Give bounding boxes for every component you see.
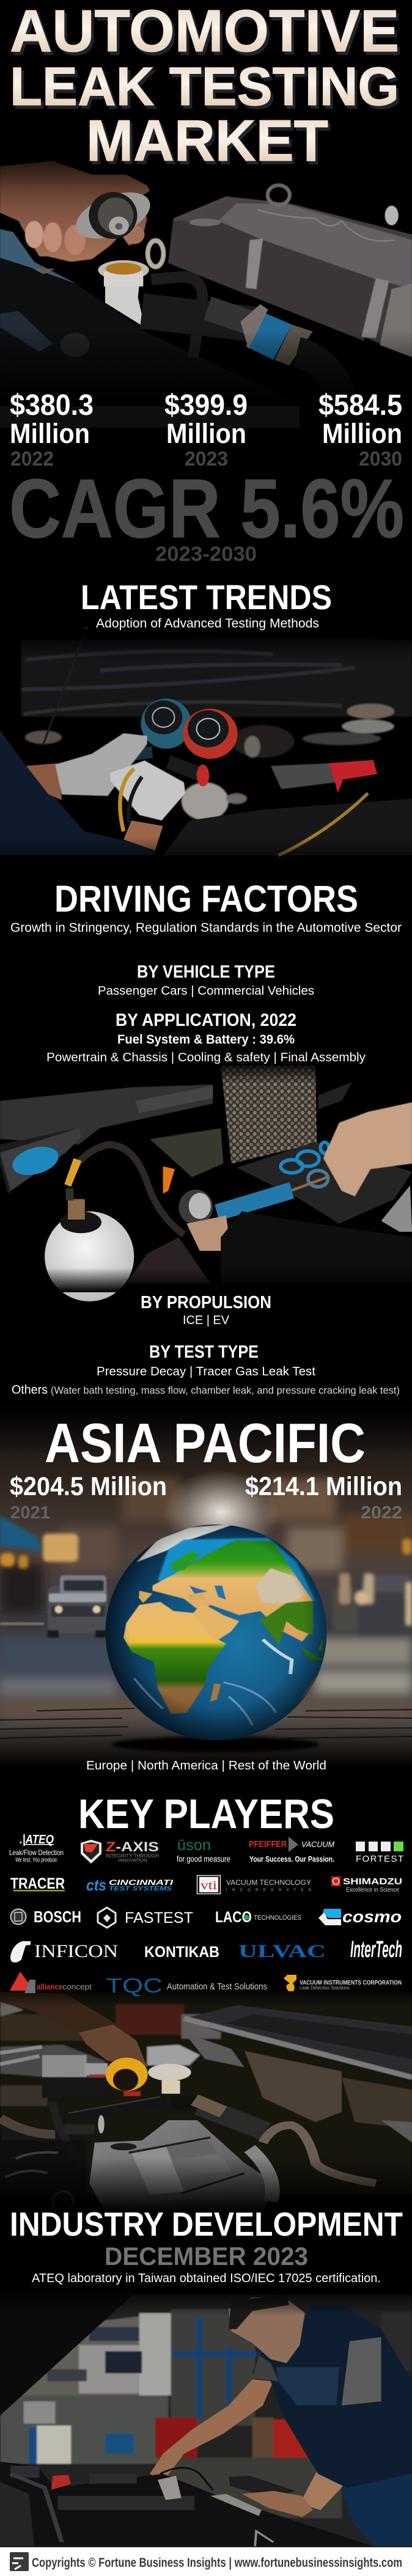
market size 2030: Million	[322, 418, 402, 449]
by propulsion: ICE | EV	[183, 1314, 230, 1327]
radiator cap	[70, 183, 156, 247]
by application: Fuel System & Battery : 39.6%	[117, 1033, 295, 1047]
by test type: (Water bath testing, mass flow, chamber leak, and pressure cracking leak test)	[51, 1385, 400, 1396]
driving factors heading	[10, 878, 402, 935]
bottle	[45, 1188, 134, 1301]
logo: Cosmo	[318, 1908, 402, 1926]
logo: Kontikab: KONTIKAB	[144, 1944, 219, 1961]
bright battery	[0, 2047, 42, 2064]
logos: key players	[9, 1833, 403, 1997]
raised hood	[0, 2287, 142, 2415]
logo: Cincinnati Test Systems: TEST SYSTEMS	[109, 1886, 172, 1892]
logo: Pfeiffer Vacuum	[249, 1837, 334, 1864]
silver pipe	[263, 2125, 376, 2183]
asia pacific 2021 value: $204.5 Million	[10, 1472, 167, 1501]
market size 2023: $399.9	[164, 389, 248, 422]
icon: globe	[105, 1523, 326, 1740]
photo: manifold gauges	[0, 627, 412, 855]
logo: VTI: vti	[200, 1879, 218, 1892]
logo: Vacuum Instruments Corporation	[284, 1975, 402, 1991]
photo: engine with yellow oil cap	[0, 1992, 412, 2212]
pressure gauge	[178, 1190, 213, 1225]
logo: VTI: INCORPORATED	[226, 1889, 312, 1892]
garage background	[0, 2295, 412, 2548]
fade under title	[0, 110, 412, 189]
logo: LACO Technologies: LACO	[215, 1909, 252, 1926]
logo: Z-Axis: INTEGRITY THROUGH	[106, 1853, 159, 1859]
logo: Shimadzu: Excellence in Science	[346, 1887, 399, 1894]
title: AUTOMOTIVE	[12, 1, 402, 67]
latest trends heading: Adoption of Advanced Testing Methods	[96, 617, 319, 631]
market size 2030	[318, 389, 402, 470]
by test type: BY TEST TYPE	[149, 1342, 259, 1362]
title: LEAK TESTING	[10, 56, 399, 117]
market size 2022: $380.3	[10, 389, 94, 422]
logo: VTI: VACUUM TECHNOLOGY	[226, 1878, 311, 1887]
logo: ATEQ	[9, 1833, 64, 1864]
hands	[186, 1102, 412, 1283]
title: MARKET	[86, 108, 328, 174]
latest trends heading: LATEST TRENDS	[81, 578, 332, 617]
market size 2023: Million	[166, 418, 246, 449]
footer logo	[10, 2552, 29, 2571]
latest trends heading	[81, 578, 332, 631]
tablet and hand	[229, 2476, 313, 2517]
logo: Cincinnati Test Systems: cts	[86, 1876, 106, 1894]
by propulsion	[141, 1293, 271, 1327]
driving factors heading: DRIVING FACTORS	[54, 878, 358, 920]
logo: Cincinnati Test Systems: CINCINNATI	[109, 1878, 174, 1887]
logo: Shimadzu: SHIMADZU	[343, 1876, 402, 1887]
by application: Powertrain & Chassis | Cooling & safety | Final Assembly	[46, 1051, 366, 1064]
logo: Inficon: INFICON	[34, 1941, 118, 1961]
radiator neck	[98, 260, 149, 327]
logo: Fastest: FASTEST	[125, 1909, 193, 1927]
logo: Ulvac: ULVAC	[238, 1941, 326, 1961]
upper engine bay	[0, 1992, 412, 2195]
logo: Z-Axis	[81, 1839, 159, 1864]
hood panel and grille	[184, 2005, 412, 2077]
photo: cooling system pressure tester	[0, 1066, 412, 1301]
reservoir	[148, 2064, 191, 2094]
fade into propulsion	[0, 1268, 412, 1292]
logo: Uson	[177, 1837, 230, 1864]
engine cover	[89, 2120, 279, 2212]
footer	[0, 2547, 412, 2576]
logo: Alliance Concept	[10, 1972, 92, 1993]
logo: TQC: TQC	[106, 1974, 163, 1997]
logo: Bosch	[11, 1908, 81, 1926]
mechanic figure	[150, 2295, 412, 2546]
logo: Fortest: FORTEST	[356, 1854, 403, 1864]
ribbed hose	[171, 2102, 200, 2104]
logo: ATEQ: We test, You produce.	[15, 1857, 58, 1864]
valve cover	[148, 185, 412, 357]
driving factors heading: Growth in Stringency, Regulation Standards in the Automotive Sector	[10, 921, 402, 935]
forearm and hand	[0, 1992, 147, 2067]
gloves and handles	[55, 733, 209, 832]
by vehicle type	[98, 962, 314, 998]
logo: Inficon	[10, 1941, 118, 1963]
logo: Uson: for good measure	[177, 1854, 230, 1864]
left car	[48, 1575, 108, 1637]
asia pacific 2022 value: 2022	[361, 1503, 402, 1523]
logo: Uson: ūson	[177, 1837, 211, 1854]
industry development heading	[10, 2205, 403, 2285]
logo: Pfeiffer Vacuum: VACUUM	[301, 1840, 334, 1849]
tool case lid	[221, 1066, 317, 1163]
lower engine details	[126, 1237, 210, 1283]
by test type: Others	[12, 1383, 48, 1397]
logo: Bosch: BOSCH	[34, 1908, 81, 1926]
by application	[46, 1011, 366, 1064]
logo: Alliance Concept: alliance	[37, 1982, 62, 1991]
market size 2030: 2030	[359, 447, 402, 470]
by test type: Pressure Decay | Tracer Gas Leak Test	[97, 1365, 315, 1378]
hose	[71, 1144, 184, 1234]
regions list: Europe | North America | Rest of the World	[86, 1759, 326, 1773]
black hose	[61, 2100, 168, 2118]
logo: LACO Technologies	[215, 1909, 301, 1926]
blue adapters	[281, 1143, 329, 1187]
asia pacific 2021 value	[10, 1472, 167, 1523]
logo: Tracer: TRACER	[10, 1875, 65, 1892]
logo: LACO Technologies: TECHNOLOGIES	[254, 1914, 301, 1922]
photo: mechanic at car	[0, 2287, 412, 2548]
blue radiator panel	[0, 229, 76, 284]
engine bay	[0, 2462, 373, 2546]
by test type	[12, 1342, 400, 1397]
logo: TQC	[106, 1974, 267, 1997]
pavement cracks	[0, 1708, 412, 1738]
logo: ATEQ: .|ATEQ	[20, 1833, 54, 1846]
logo: Pfeiffer Vacuum: Your Success. Our Passion.	[249, 1854, 334, 1864]
market size 2022: Million	[10, 418, 90, 449]
insulation	[245, 2051, 342, 2122]
key players heading: KEY PLAYERS	[78, 1791, 334, 1837]
asia pacific 2022 value: $214.1 Million	[245, 1472, 402, 1501]
yellow cap	[106, 2058, 148, 2096]
industry development heading: DECEMBER 2023	[105, 2242, 308, 2270]
logo: Z-Axis: INNOVATION	[118, 1859, 147, 1863]
market size 2023	[164, 389, 248, 470]
tool case tray	[237, 1142, 412, 1224]
by vehicle type: Passenger Cars | Commercial Vehicles	[98, 984, 314, 998]
logo: Vacuum Instruments Corporation: Leak Detection Solutions	[300, 1985, 350, 1991]
logo: Fastest	[98, 1908, 193, 1928]
hoses	[142, 277, 342, 395]
hood and engine bay	[21, 638, 412, 821]
market size 2023: 2023	[185, 447, 228, 470]
logo: VTI	[197, 1876, 312, 1894]
logo: Fortest	[356, 1842, 403, 1864]
right cars	[333, 1573, 412, 1634]
CAGR: 2023-2030	[155, 543, 257, 566]
market size 2030: $584.5	[318, 389, 402, 422]
title	[10, 0, 402, 177]
asia pacific heading: ASIA PACIFIC	[45, 1413, 366, 1474]
by application: BY APPLICATION, 2022	[116, 1011, 296, 1030]
market size 2022	[10, 389, 94, 470]
asia pacific 2021 value: 2021	[10, 1503, 50, 1523]
title: LEAK TESTING	[12, 59, 402, 120]
market size 2022: 2022	[10, 447, 54, 470]
logo: Cosmo: cosmo	[342, 1908, 402, 1926]
blue reservoir cap	[9, 1142, 62, 1180]
logo: Pfeiffer Vacuum: PFEIFFER	[249, 1839, 287, 1850]
logo: Z-Axis: Z-AXIS	[106, 1839, 159, 1854]
photo: street background	[0, 1399, 412, 1769]
asia pacific 2022 value	[245, 1472, 402, 1523]
photo: radiator cap and engine	[0, 161, 412, 428]
engine bay panels	[0, 1082, 352, 1194]
gauges	[141, 698, 238, 759]
blue pump tool	[217, 1190, 292, 1213]
by vehicle type: BY VEHICLE TYPE	[137, 962, 275, 982]
logo: TQC: Automation & Test Solutions	[167, 1981, 267, 1992]
title: MARKET	[89, 111, 331, 177]
logo: Shimadzu	[331, 1876, 402, 1894]
by propulsion: BY PROPULSION	[141, 1293, 271, 1312]
sleeve and arm	[0, 731, 155, 855]
logo: Cincinnati Test Systems	[86, 1876, 174, 1894]
logo: Alliance Concept: concept	[62, 1982, 92, 1991]
logo: ATEQ: Leak/Flow Detection	[9, 1848, 64, 1857]
industry development heading: ATEQ laboratory in Taiwan obtained ISO/IEC 17025 certification.	[32, 2272, 381, 2285]
hand holding cap	[0, 161, 150, 262]
